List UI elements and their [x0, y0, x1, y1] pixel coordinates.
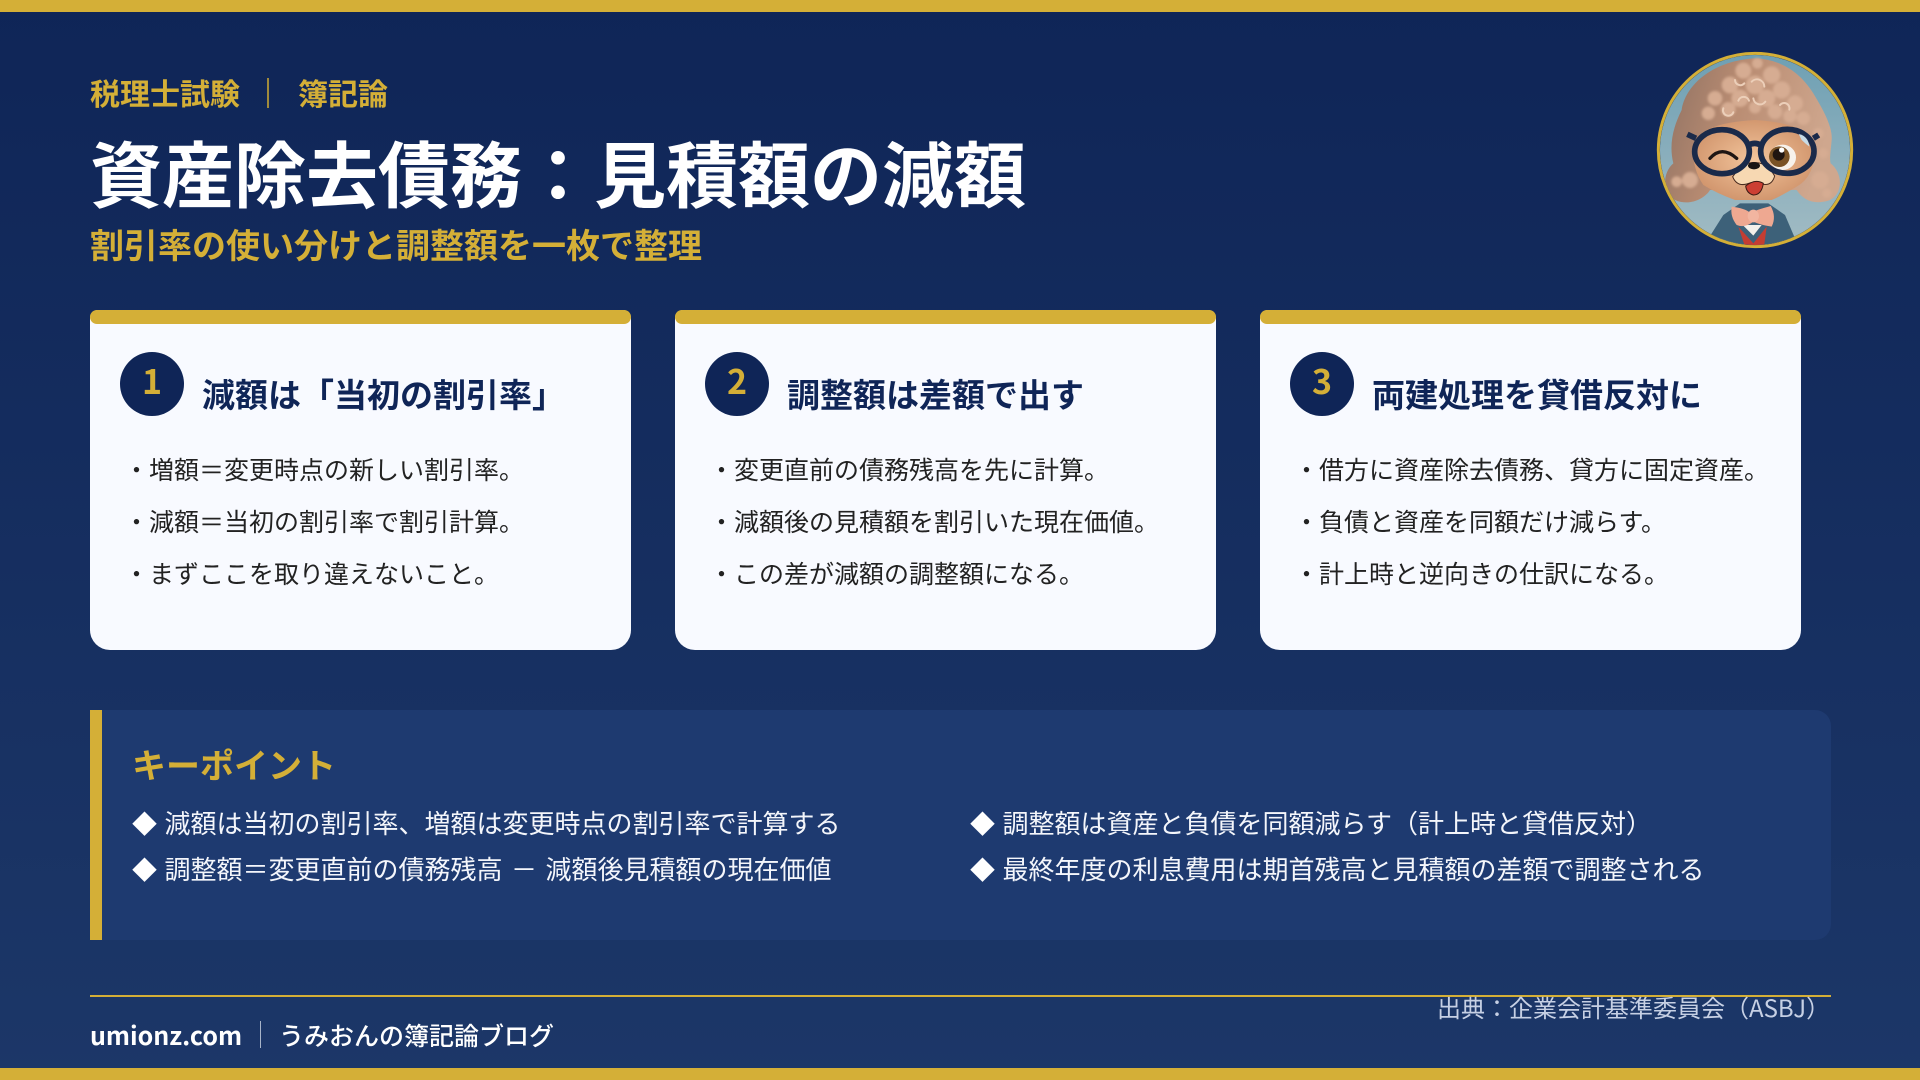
key point 4: 最終年度の利息費用は期首残高と見積額の差額で調整される [1002, 850, 1705, 887]
key point 2: 調整額＝変更直前の債務残高 － 減額後見積額の現在価値 [164, 850, 832, 887]
key points accent bar [90, 710, 102, 940]
key point 2: ◆ [132, 851, 157, 887]
eyebrow: exam and subject: 税理士試験 [90, 70, 240, 114]
key point 4: ◆ [970, 851, 995, 887]
card 3 bullet 1: ・借方に資産除去債務、貸方に固定資産。 [1294, 451, 1769, 487]
bottom gold bar [0, 1068, 1920, 1080]
panel: key points [90, 710, 1831, 940]
card 2 bullet 1: ・変更直前の債務残高を先に計算。 [709, 451, 1109, 487]
card 1 bullet 3: ・まずここを取り違えないこと。 [124, 555, 499, 591]
footer brand: umionz.com [90, 1017, 242, 1053]
eyebrow: exam and subject [90, 70, 388, 114]
key point 3: ◆ [970, 805, 995, 841]
card 1 bullet 2: ・減額＝当初の割引率で割引計算。 [124, 503, 524, 539]
card 2 bullet 2: ・減額後の見積額を割引いた現在価値。 [709, 503, 1159, 539]
card 2 bullet 3: ・この差が減額の調整額になる。 [709, 555, 1084, 591]
top gold bar [0, 0, 1920, 12]
card 3 heading: 両建処理を貸借反対に [1372, 369, 1702, 417]
footer brand: うみおんの簿記論ブログ [279, 1017, 554, 1053]
card 2 number [705, 352, 769, 416]
card 2 number: 2 [727, 355, 747, 404]
card 3 number [1290, 352, 1354, 416]
panel: card 3 [1260, 310, 1800, 650]
key points heading: キーポイント [132, 739, 336, 788]
footer rule [90, 995, 1831, 997]
panel: card 2 [675, 310, 1216, 650]
title: 資産除去債務：見積額の減額 [90, 118, 1026, 223]
icon: mascot avatar [1656, 52, 1854, 248]
eyebrow: exam and subject: 簿記論 [298, 70, 388, 114]
card 1 top accent [90, 310, 630, 324]
card 1 heading: 減額は「当初の割引率」 [202, 369, 565, 417]
subtitle: 割引率の使い分けと調整額を一枚で整理 [90, 219, 702, 268]
key point 1: 減額は当初の割引率、増額は変更時点の割引率で計算する [164, 804, 841, 841]
card 2 heading: 調整額は差額で出す [787, 369, 1084, 417]
card 1 bullet 1: ・増額＝変更時点の新しい割引率。 [124, 451, 524, 487]
card 3 number: 3 [1312, 355, 1332, 404]
card 3 bullet 3: ・計上時と逆向きの仕訳になる。 [1294, 555, 1669, 591]
card 3 top accent [1260, 310, 1800, 324]
key point 3: 調整額は資産と負債を同額減らす（計上時と貸借反対） [1002, 804, 1652, 841]
source credit: 出典：企業会計基準委員会（ASBJ） [1437, 989, 1830, 1024]
card 1 number [120, 352, 184, 416]
card 1 number: 1 [142, 355, 162, 404]
card 3 bullet 2: ・負債と資産を同額だけ減らす。 [1294, 503, 1666, 539]
key point 1: ◆ [132, 805, 157, 841]
footer brand [90, 1017, 554, 1053]
card 2 top accent [675, 310, 1216, 324]
panel: card 1 [90, 310, 630, 650]
